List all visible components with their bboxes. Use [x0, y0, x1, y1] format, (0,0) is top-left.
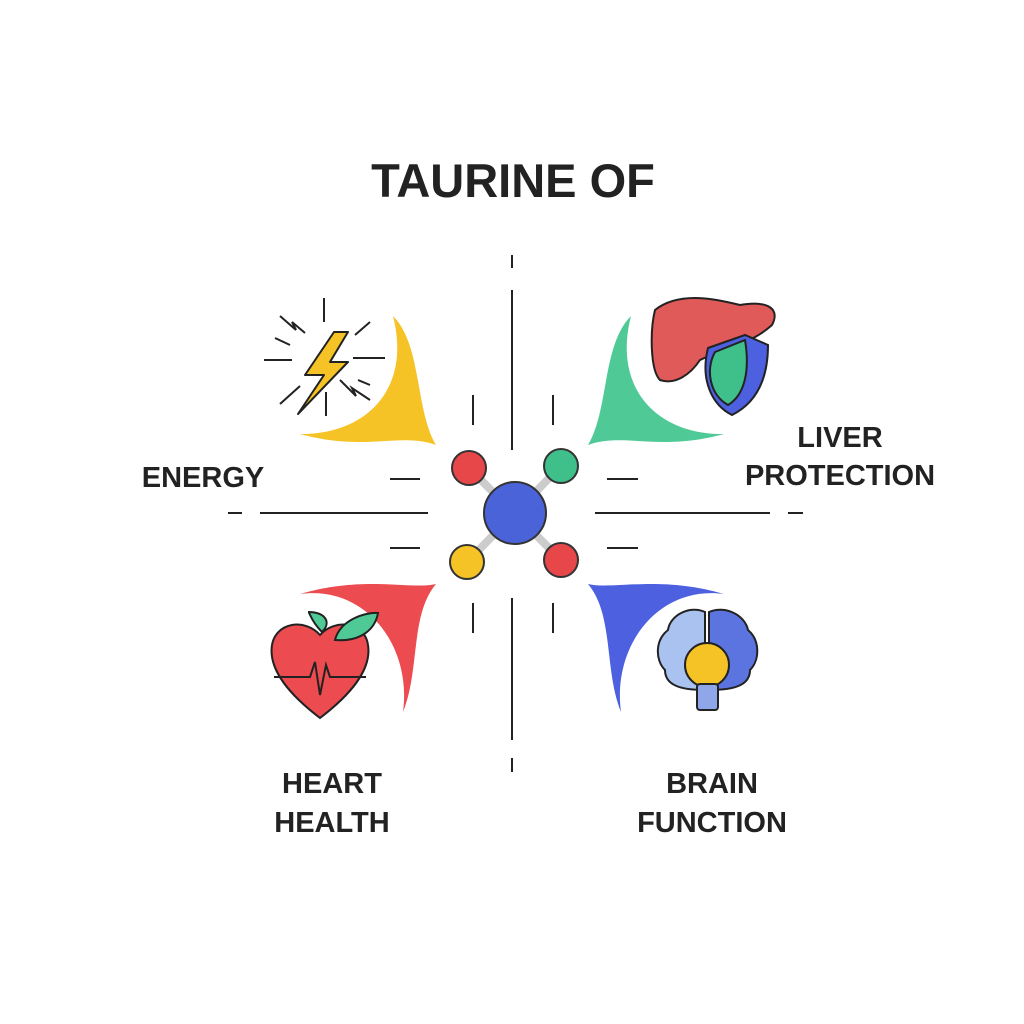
label: energy: ENERGY	[142, 462, 264, 494]
title: TAURINE OF	[371, 154, 655, 207]
molecule	[450, 449, 578, 579]
icon: brain	[658, 610, 757, 710]
label: liver protection: LIVER	[797, 422, 883, 454]
arc: green	[588, 316, 724, 445]
icon: heart	[272, 612, 378, 718]
arc: blue	[588, 584, 724, 712]
label: brain function: BRAIN	[666, 768, 758, 800]
arc: yellow	[300, 316, 436, 445]
label: liver protection: PROTECTION	[745, 460, 935, 492]
icon: lightning	[264, 298, 385, 416]
arc: red	[300, 584, 436, 712]
label: brain function: FUNCTION	[637, 807, 787, 839]
label: heart health: HEALTH	[274, 807, 390, 839]
icon: liver	[652, 298, 775, 415]
label: heart health: HEART	[282, 768, 382, 800]
